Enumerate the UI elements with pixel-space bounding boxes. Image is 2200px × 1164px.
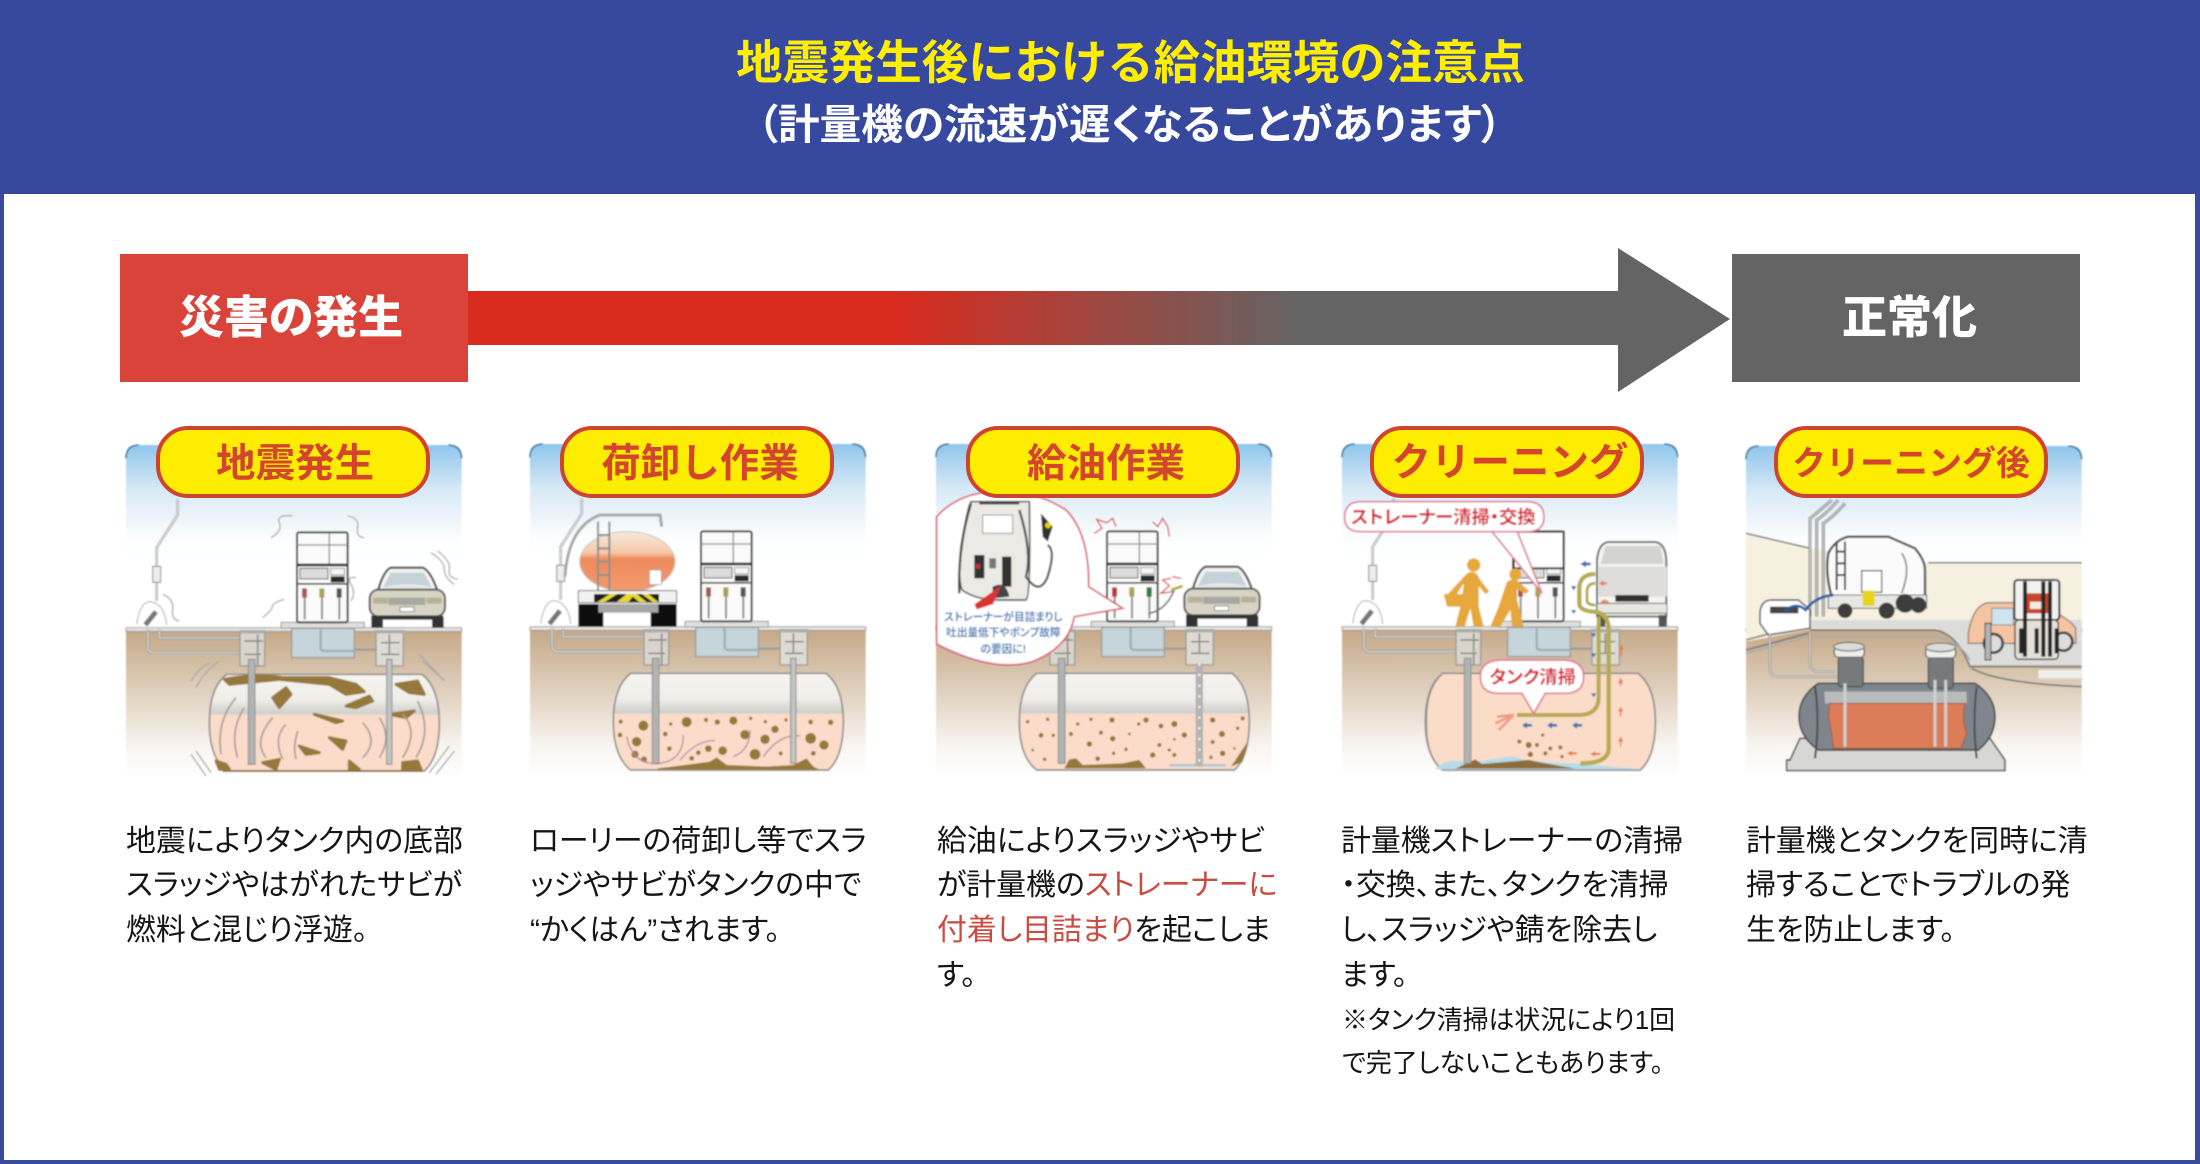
text block: 計量機とタンクを同時に清 — [1746, 825, 2088, 858]
label pill — [562, 428, 832, 496]
label pill: クリーニング — [1392, 441, 1628, 485]
text block: “かくはん”されます。 — [530, 914, 780, 947]
title: 地震発生後における給油環境の注意点 — [736, 37, 1525, 89]
text block: ※タンク清掃は状況により1回 — [1342, 1006, 1675, 1035]
box: normalisation — [1732, 254, 2080, 382]
text block: ッジやサビがタンクの中で — [530, 869, 862, 902]
text block: 計量機ストレーナーの清掃 — [1341, 825, 1683, 858]
text block: 生を防止します。 — [1746, 914, 1955, 947]
text block: ・交換、また、タンクを清掃 — [1341, 869, 1669, 902]
label pill — [158, 428, 428, 496]
panel: unloading work — [530, 428, 867, 947]
text block: ます。 — [1341, 959, 1408, 992]
illustration: station after cleaning — [1746, 446, 2082, 780]
text block — [937, 825, 1277, 992]
illustration: strainer clogging: の要因に! — [980, 644, 1026, 656]
panel: refuelling work — [936, 428, 1277, 992]
text block — [126, 825, 463, 947]
panel: after cleaning — [1746, 428, 2088, 947]
illustration: strainer clogging: 吐出量低下やポンプ故障 — [946, 626, 1061, 639]
illustration: earthquake shakes tank — [126, 445, 462, 779]
label pill: クリーニング後 — [1792, 445, 2030, 483]
text block — [530, 825, 867, 947]
text block: スラッジやはがれたサビが — [126, 869, 463, 902]
text block: し、スラッジや錆を除去し — [1341, 914, 1657, 947]
subtitle: （計量機の流速が遅くなることがあります） — [757, 101, 1502, 148]
label pill — [1372, 428, 1642, 496]
label pill: 荷卸し作業 — [601, 442, 799, 486]
text block: 燃料と混じり浮遊。 — [126, 914, 368, 947]
box: disaster occurrence — [120, 254, 468, 382]
text block: す。 — [937, 959, 976, 992]
illustration: strainer and tank cleaning: タンク清掃 — [1489, 666, 1576, 687]
text block: 付着し目詰まりを起こしま — [937, 914, 1270, 947]
text block: で完了しないこともあります。 — [1342, 1050, 1663, 1078]
text block: 給油によりスラッジやサビ — [937, 825, 1265, 858]
label pill — [968, 428, 1238, 496]
illustration: tanker unloading — [530, 444, 866, 778]
text block — [1746, 825, 2088, 947]
illustration: strainer clogging: ストレーナーが目詰まりし — [944, 610, 1063, 623]
panel: earthquake — [126, 428, 463, 947]
timeline: disaster to normalisation — [120, 248, 2080, 392]
text block: が計量機のストレーナーに — [937, 869, 1277, 902]
label pill: 地震発生 — [216, 442, 374, 486]
text block: ローリーの荷卸し等でスラ — [530, 825, 867, 858]
illustration: strainer and tank cleaning — [1342, 444, 1678, 778]
header band — [0, 0, 2200, 194]
text block — [1341, 825, 1683, 1078]
label pill: 給油作業 — [1027, 442, 1185, 486]
panel: cleaning — [1341, 428, 1683, 1078]
label pill — [1776, 428, 2046, 496]
arrow — [467, 248, 1730, 392]
illustration: strainer and tank cleaning: ストレーナー清掃・交換 — [1351, 507, 1536, 528]
box: normalisation: 正常化 — [1842, 292, 1977, 343]
illustration: strainer clogging — [936, 444, 1272, 778]
box: disaster occurrence: 災害の発生 — [179, 292, 403, 343]
text block: 地震によりタンク内の底部 — [126, 825, 463, 858]
text block: 掃することでトラブルの発 — [1746, 869, 2070, 902]
